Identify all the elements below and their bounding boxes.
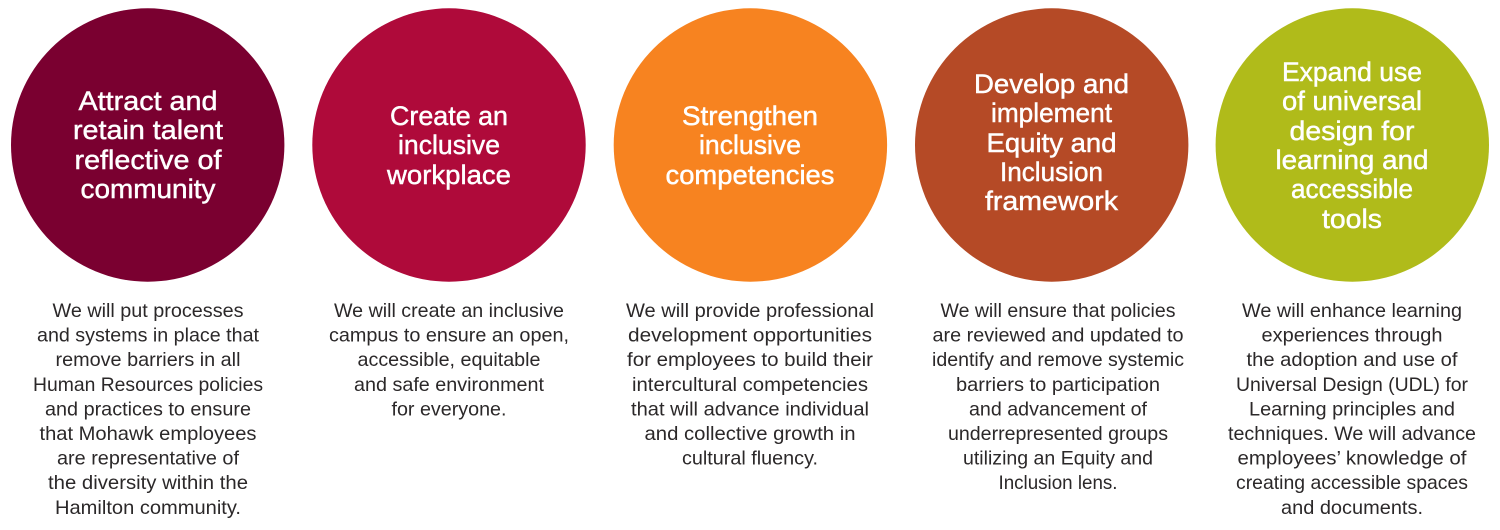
description: universal design for learning: the adoption and use of	[1246, 350, 1458, 371]
circle heading: equity and inclusion framework: Inclusion	[1000, 157, 1103, 187]
description: equity and inclusion framework: and advancement of	[969, 399, 1148, 420]
panel: universal design for learning	[1216, 8, 1489, 519]
description: universal design for learning: experiences through	[1262, 326, 1442, 347]
description: equity and inclusion framework	[932, 301, 1184, 494]
description: strengthen inclusive competencies: cultural fluency.	[682, 449, 818, 470]
description: create an inclusive workplace: for everyone.	[392, 399, 506, 420]
description: universal design for learning: creating accessible spaces	[1236, 473, 1468, 494]
circle heading: universal design for learning: of universal	[1282, 86, 1422, 116]
description: create an inclusive workplace: campus to ensure an open,	[329, 326, 569, 347]
panel: strengthen inclusive competencies	[614, 8, 887, 470]
circle heading: create an inclusive workplace: workplace	[386, 160, 511, 190]
description: attract and retain talent: We will put processes	[52, 301, 244, 322]
description: strengthen inclusive competencies	[626, 301, 874, 470]
description: universal design for learning: and documents.	[1281, 498, 1423, 519]
circle heading: create an inclusive workplace	[312, 8, 586, 282]
description: attract and retain talent: are representative of	[57, 449, 240, 470]
circle heading: universal design for learning: tools	[1322, 204, 1382, 234]
circle heading: attract and retain talent: community	[80, 174, 216, 204]
description: attract and retain talent: and practices to ensure	[45, 399, 251, 420]
description: equity and inclusion framework: We will ensure that policies	[940, 301, 1176, 322]
description: equity and inclusion framework: underrepresented groups	[948, 424, 1168, 445]
description: strengthen inclusive competencies: for employees to build their	[627, 350, 874, 371]
description: equity and inclusion framework: are reviewed and updated to	[932, 326, 1184, 347]
description: create an inclusive workplace: We will create an inclusive	[334, 301, 564, 322]
circle heading: universal design for learning: design for	[1290, 116, 1415, 146]
description: attract and retain talent: remove barriers in all	[56, 350, 240, 371]
description: equity and inclusion framework: Inclusion lens.	[998, 473, 1118, 494]
description: attract and retain talent: Human Resources policies	[33, 375, 263, 396]
description: create an inclusive workplace: and safe environment	[354, 375, 545, 396]
circle heading: strengthen inclusive competencies: Strengthen	[682, 101, 818, 131]
description: attract and retain talent: Hamilton community.	[55, 498, 241, 519]
description: equity and inclusion framework: utilizing an Equity and	[963, 449, 1153, 470]
circle heading: create an inclusive workplace: inclusive	[398, 130, 500, 160]
description: strengthen inclusive competencies: development opportunities	[628, 326, 872, 347]
circle heading: attract and retain talent: retain talent	[73, 115, 224, 145]
description: create an inclusive workplace	[329, 301, 569, 420]
description: strengthen inclusive competencies: and collective growth in	[644, 424, 856, 445]
description: strengthen inclusive competencies: that will advance individual	[631, 399, 869, 420]
circle heading: universal design for learning: learning and	[1276, 145, 1428, 175]
circle heading: equity and inclusion framework: Equity and	[986, 128, 1116, 158]
description: attract and retain talent	[33, 301, 263, 519]
circle heading: equity and inclusion framework: Develop and	[974, 69, 1129, 99]
panel: equity and inclusion framework	[915, 8, 1188, 494]
circle heading: create an inclusive workplace: Create an	[390, 101, 508, 131]
circle heading: attract and retain talent	[11, 8, 284, 282]
description: universal design for learning	[1228, 301, 1476, 519]
panel: create an inclusive workplace	[312, 8, 586, 420]
description: universal design for learning: Universal Design (UDL) for	[1236, 375, 1469, 396]
circle heading: universal design for learning: Expand use	[1282, 57, 1422, 87]
circle heading: universal design for learning: accessible	[1291, 174, 1413, 204]
circle heading: attract and retain talent: Attract and	[78, 86, 218, 116]
circle heading: strengthen inclusive competencies	[614, 8, 887, 282]
description: attract and retain talent: that Mohawk employees	[40, 424, 256, 445]
panel: attract and retain talent	[11, 8, 284, 519]
description: universal design for learning: We will enhance learning	[1242, 301, 1462, 322]
description: equity and inclusion framework: identify and remove systemic	[932, 350, 1184, 371]
circle heading: strengthen inclusive competencies: inclusive	[699, 130, 801, 160]
description: universal design for learning: techniques. We will advance	[1228, 424, 1476, 445]
description: universal design for learning: employees’ knowledge of	[1238, 449, 1467, 470]
circle heading: attract and retain talent: reflective of	[74, 145, 222, 175]
description: universal design for learning: Learning principles and	[1249, 399, 1455, 420]
description: attract and retain talent: the diversity within the	[48, 473, 248, 494]
circle heading: strengthen inclusive competencies: competencies	[666, 160, 834, 190]
description: strengthen inclusive competencies: We will provide professional	[626, 301, 874, 322]
description: strengthen inclusive competencies: intercultural competencies	[632, 375, 868, 396]
circle heading: equity and inclusion framework: framework	[985, 186, 1119, 216]
description: create an inclusive workplace: accessible, equitable	[358, 350, 540, 371]
description: attract and retain talent: and systems in place that	[37, 326, 260, 347]
circle heading: equity and inclusion framework	[915, 8, 1188, 282]
circle heading: universal design for learning	[1216, 8, 1489, 282]
circle heading: equity and inclusion framework: implement	[991, 98, 1113, 128]
description: equity and inclusion framework: barriers to participation	[956, 375, 1160, 396]
